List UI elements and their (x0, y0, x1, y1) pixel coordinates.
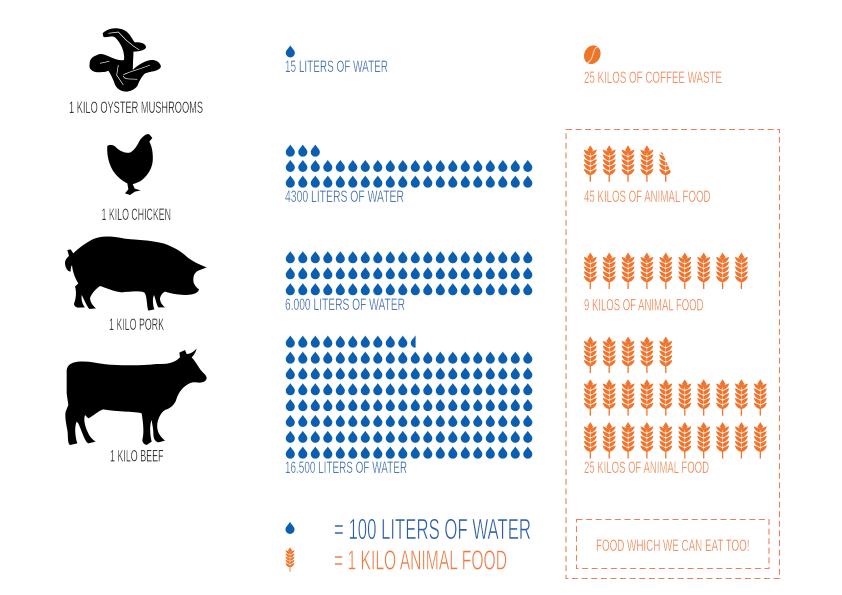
icon: pig (65, 237, 207, 311)
label: 45 kilos: 45 KILOS OF ANIMAL FOOD (584, 187, 710, 206)
wheat: beef 25 kilos (584, 336, 767, 458)
wheat: pork 9 kilos (584, 252, 748, 289)
label: 15 liters: 15 LITERS OF WATER (285, 57, 388, 76)
icon: coffee bean (581, 43, 604, 67)
icon: single water drop, mushrooms (286, 45, 295, 57)
label: chicken: 1 KILO CHICKEN (102, 205, 171, 224)
label: 9 kilos: 9 KILOS OF ANIMAL FOOD (584, 296, 704, 314)
label: oyster mushrooms: 1 KILO OYSTER MUSHROOMS (69, 98, 203, 117)
label: pork: 1 KILO PORK (109, 315, 164, 334)
wheat: chicken 4.5 kilos (584, 145, 672, 182)
drops: pork 6000 liters (286, 251, 532, 295)
label: 25 kilos: 25 KILOS OF ANIMAL FOOD (584, 458, 709, 477)
drops: beef 16500 liters (286, 336, 532, 459)
legend: water drop: = 100 LITERS OF WATER (334, 514, 531, 546)
legend: water drop (285, 514, 531, 546)
label: 16500 liters: 16.500 LITERS OF WATER (285, 458, 407, 477)
legend: wheat: = 1 KILO ANIMAL FOOD (334, 544, 507, 576)
icon: chicken (107, 134, 153, 195)
label: beef: 1 KILO BEEF (110, 446, 164, 466)
label: coffee waste: 25 KILOS OF COFFEE WASTE (584, 68, 722, 87)
legend: wheat (286, 544, 507, 576)
icon: cow (65, 348, 207, 445)
icon: oyster mushrooms (89, 28, 161, 92)
label: 6000 liters: 6.000 LITERS OF WATER (285, 295, 405, 314)
callout: food we can eat (576, 520, 769, 568)
drops: chicken 4300 liters (286, 145, 532, 188)
panel: animal food outline (566, 130, 780, 578)
label: 4300 liters: 4300 LITERS OF WATER (285, 187, 404, 206)
